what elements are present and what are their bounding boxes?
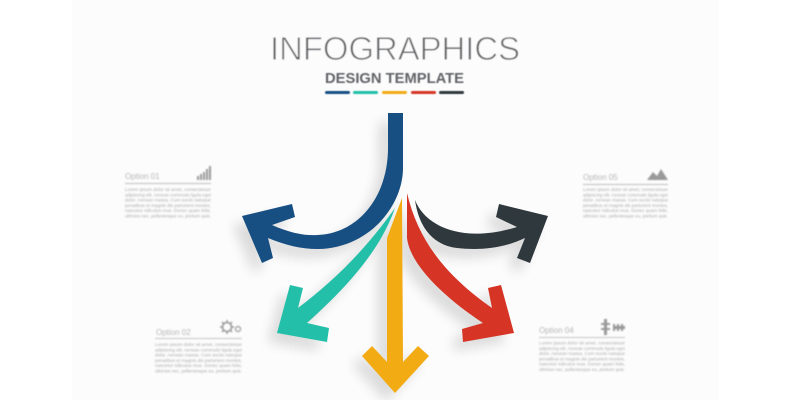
panel: option 02 [155,320,243,374]
body text: option 01: penatibus et magnis dis parturient montes, [125,203,211,208]
body text: option 04: nascetur ridiculus mus. Donec quam felis, [539,362,625,367]
icon: puzzle connectors [601,319,625,335]
icon: mountain chart [647,169,668,180]
heading: option 01: Option 01 [125,172,160,181]
subtitle: DESIGN TEMPLATE [325,70,464,87]
arrow: charcoal (option 05) [415,200,548,263]
body text: option 04: dolor. Aenean massa. Cum sociis natoque [539,351,625,356]
body text: option 02: dolor. Aenean massa. Cum sociis natoque [155,353,242,358]
heading: option 05: Option 05 [583,173,618,182]
body text: option 01: nascetur ridiculus mus. Donec quam felis, [125,208,211,213]
body text: option 05: nascetur ridiculus mus. Donec quam felis, [583,208,668,213]
colour key bars [325,91,464,94]
body text: option 02: ultricies nec, pellentesque eu, pretium quis. [155,368,242,374]
body text: option 01: ultricies nec, pellentesque eu, pretium quis. [125,214,211,218]
body text: option 02: adipiscing elit. Aenean commodo ligula eget [155,347,243,352]
body text: option 05 [583,187,669,218]
body text: option 02: penatibus et magnis dis parturient montes, [155,358,242,363]
panel: option 05 [583,169,669,218]
body text: option 04: penatibus et magnis dis parturient montes, [539,356,625,361]
body text: option 04: adipiscing elit. Aenean commodo ligula eget [539,346,626,351]
arrow: blue (option 01) [242,113,403,263]
body text: option 02: nascetur ridiculus mus. Donec quam felis, [155,363,242,368]
arrow: red (option 04) [407,193,514,342]
body text: option 04: ultricies nec, pellentesque eu, pretium quis. [539,367,625,372]
arrow: yellow (option 03) [362,198,429,393]
arrow shadows [233,122,539,400]
body text: option 05: Lorem ipsum dolor sit amet, consectetuer [583,187,668,192]
body text: option 05: penatibus et magnis dis parturient montes, [583,203,668,208]
panel: option 04 [539,319,626,372]
body text: option 05: dolor. Aenean massa. Cum sociis natoque [583,198,668,203]
panel: option 01 [125,166,212,218]
body text: option 05: adipiscing elit. Aenean commodo ligula eget [583,192,669,197]
body text: option 01: dolor. Aenean massa. Cum sociis natoque [125,198,211,203]
icon: bar chart [197,166,211,180]
title: INFOGRAPHICS [270,31,520,68]
body text: option 01 [125,187,212,218]
body text: option 01: adipiscing elit. Aenean commodo ligula eget [125,192,212,197]
body text: option 02: Lorem ipsum dolor sit amet, consectetuer [155,342,242,347]
arrow: teal (option 02) [277,208,395,342]
heading: option 02: Option 02 [156,328,191,337]
body text: option 05: ultricies nec, pellentesque eu, pretium quis. [583,214,668,218]
body text: option 02 [155,342,243,374]
heading: option 04: Option 04 [539,326,574,335]
body text: option 01: Lorem ipsum dolor sit amet, consectetuer [125,187,211,192]
icon: gears [220,320,240,334]
body text: option 04: Lorem ipsum dolor sit amet, consectetuer [539,340,625,346]
body text: option 04 [539,340,626,372]
